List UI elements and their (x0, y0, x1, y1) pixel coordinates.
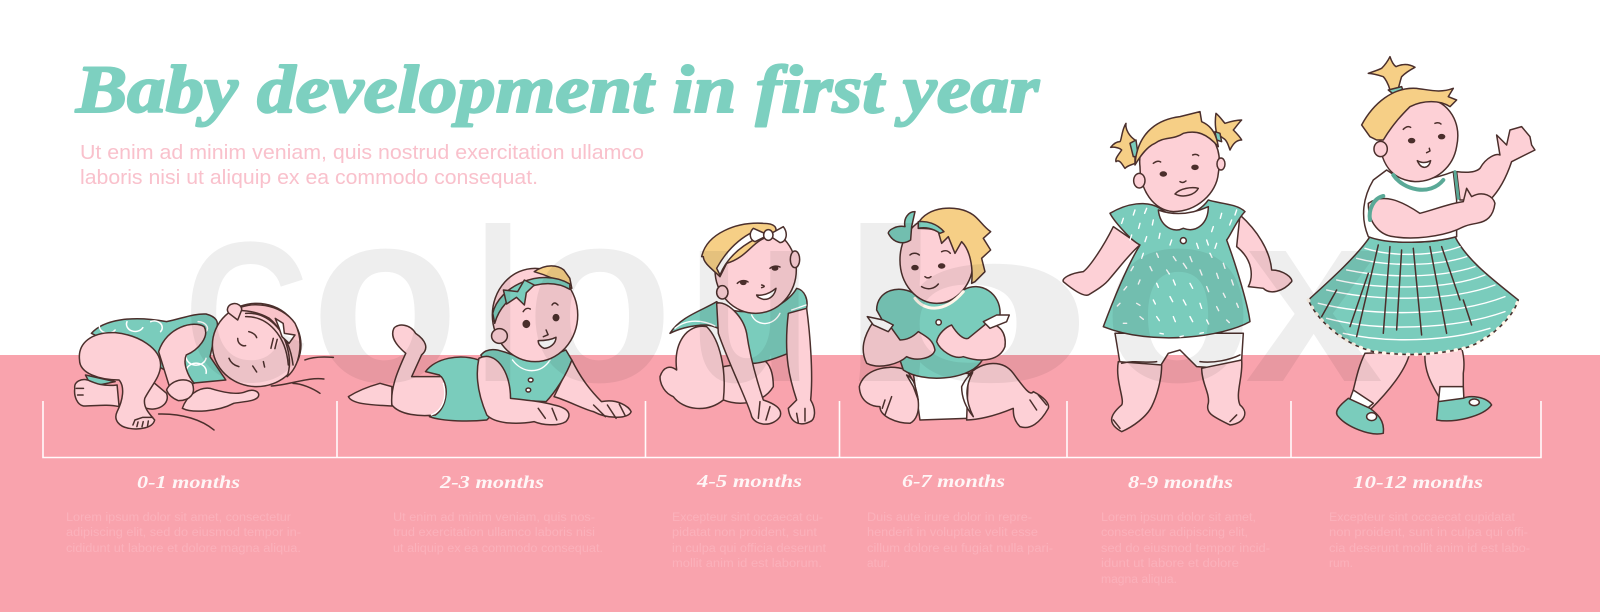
stage text: 0-1 months: Lorem ipsum dolor sit amet, consectetur (66, 512, 291, 524)
baby: 2-3 months on tummy (348, 266, 631, 425)
timeline bracket (43, 401, 1541, 458)
watermark: u (687, 159, 813, 434)
stage text: 6-7 months: Duis aute irure dolor in repre- (867, 512, 1032, 524)
watermark: o (1103, 159, 1253, 434)
baby: 8-9 months standing (1063, 112, 1292, 432)
stage text: 8-9 months: Lorem ipsum dolor sit amet, (1101, 512, 1256, 524)
stage text: 6-7 months (867, 512, 1053, 570)
stage text: 6-7 months: atur. (867, 558, 890, 570)
watermark: x (1245, 159, 1383, 434)
stage text: 6-7 months: cillum dolore eu fugiat nulla pari- (867, 543, 1053, 555)
stage text: 8-9 months (1101, 512, 1270, 586)
stage text: 10-12 months (1329, 512, 1530, 570)
head (715, 227, 796, 313)
head (1140, 123, 1219, 212)
stage text: 0-1 months: cididunt ut labore et dolore magna aliqua. (66, 543, 301, 555)
stage text: 4-5 months (672, 512, 827, 570)
baby: 6-7 months sitting (859, 208, 1049, 427)
watermark: l (473, 185, 523, 428)
subtitle: Ut enim ad minim veniam, quis nostrud exercitation ullamco (80, 142, 644, 164)
stage label: 2-3 months: 2-3 months (439, 472, 544, 492)
stage text: 10-12 months: cia deserunt mollit anim id est labo- (1329, 543, 1530, 555)
stage text: 2-3 months: Ut enim ad minim veniam, quis nos- (393, 512, 595, 524)
baby: 10-12 months walking (1308, 57, 1535, 434)
stage text: 4-5 months: mollit anim id est laborum. (672, 558, 822, 570)
stage text: 0-1 months (66, 512, 301, 555)
baby: 4-5 months crawling (660, 223, 814, 424)
stage text: 10-12 months: rum. (1329, 558, 1353, 570)
baby: 0-1 months sleeping (75, 303, 333, 430)
watermark: o (311, 159, 459, 434)
stage text: 0-1 months: adipiscing elit, sed do eiusmod tempor in- (66, 527, 301, 539)
stage text: 4-5 months: pidatat non proident, sunt (672, 527, 818, 539)
head (1380, 98, 1458, 182)
watermark (184, 159, 1383, 434)
stage text: 10-12 months: non proident, sunt in culpa qui offi- (1329, 527, 1528, 539)
stage text: 2-3 months: trud exercitation ullamco laboris nisi (393, 527, 595, 539)
stage text: 4-5 months: Excepteur sint occaecat cu- (672, 512, 823, 524)
ponytail (1368, 57, 1415, 90)
head (492, 268, 578, 362)
stage label: 6-7 months: 6-7 months (902, 471, 1005, 491)
subtitle: laboris nisi ut aliquip ex ea commodo consequat. (80, 167, 538, 189)
title: Baby development in first year (75, 51, 1040, 127)
stage text: 8-9 months: sed do eiusmod tempor incid- (1101, 543, 1270, 555)
stage label: 4-5 months: 4-5 months (696, 471, 802, 491)
head (900, 217, 973, 303)
stage label: 10-12 months: 10-12 months (1353, 472, 1483, 492)
head (212, 303, 301, 387)
watermark: o (526, 159, 673, 434)
stage label: 0-1 months: 0-1 months (137, 472, 240, 492)
stage text: 8-9 months: consectetur adipiscing elit, (1101, 527, 1248, 539)
pink floor band (0, 355, 1600, 612)
stage text: 8-9 months: magna aliqua. (1101, 574, 1177, 586)
watermark: C (184, 201, 309, 424)
watermark: b (830, 185, 1097, 428)
stage text: 6-7 months: henderit in voluptate velit esse (867, 527, 1038, 539)
stage text: 2-3 months: ut aliquip ex ea commodo consequat. (393, 543, 603, 555)
stage text: 2-3 months (393, 512, 603, 555)
stage label: 8-9 months: 8-9 months (1128, 472, 1233, 492)
stage text: 4-5 months: in culpa qui officia deserunt (672, 543, 827, 555)
stage text: 8-9 months: idunt ut labore et dolore (1101, 558, 1239, 570)
stage text: 10-12 months: Excepteur sint occaecat cupidatat (1329, 512, 1516, 524)
pigtails (1111, 123, 1135, 168)
subtitle (80, 142, 644, 189)
